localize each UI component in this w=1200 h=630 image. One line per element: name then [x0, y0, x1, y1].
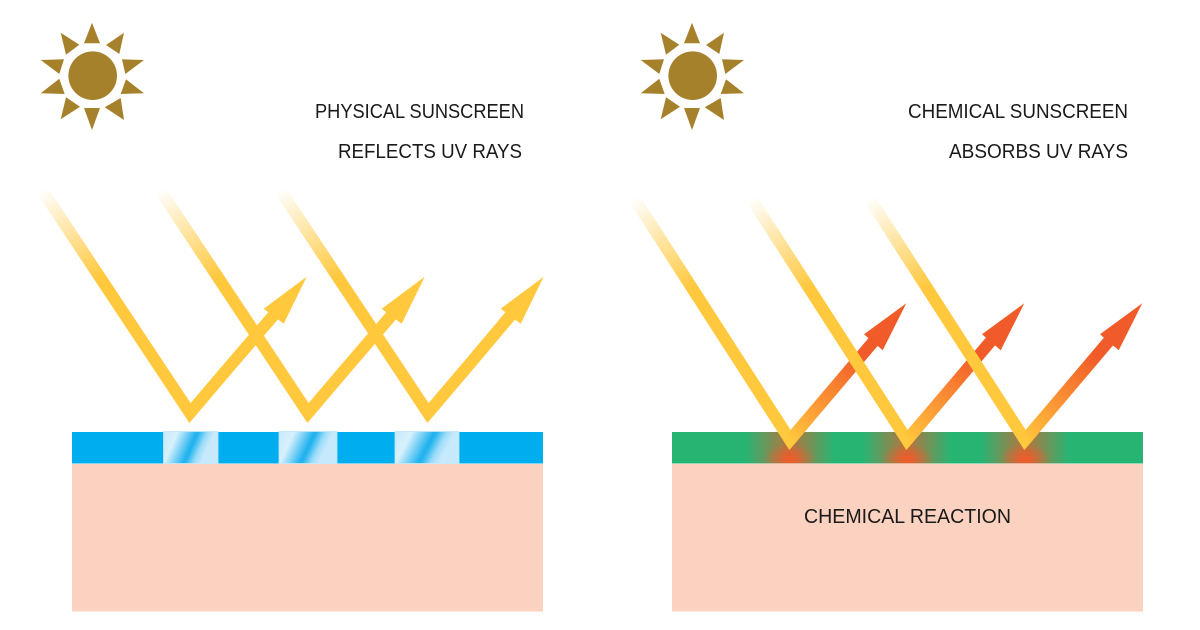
- icon: sun (physical): [41, 23, 144, 130]
- arrow: reflected ray 3: [280, 190, 544, 413]
- sunscreen layer: green with reaction glow: [672, 432, 1143, 464]
- arrow: reflected ray 1: [42, 190, 307, 413]
- heading: physical sunscreen: PHYSICAL SUNSCREEN: [315, 101, 524, 123]
- skin layer: [672, 464, 1143, 612]
- label: chemical reaction: CHEMICAL REACTION: [804, 506, 1011, 528]
- panel: chemical sunscreen: [634, 23, 1143, 611]
- sunscreen layer: blue with mineral particles: [72, 432, 543, 464]
- icon: sun (chemical): [641, 23, 744, 130]
- subheading: reflects uv rays: REFLECTS UV RAYS: [338, 141, 522, 163]
- panel: physical sunscreen: [41, 23, 544, 611]
- arrow: absorbed ray 2: [751, 198, 1024, 440]
- arrow: absorbed ray 3: [869, 198, 1142, 440]
- subheading: absorbs uv rays: ABSORBS UV RAYS: [949, 141, 1128, 163]
- arrow: reflected ray 2: [160, 190, 425, 413]
- heading: chemical sunscreen: CHEMICAL SUNSCREEN: [908, 101, 1128, 123]
- skin layer: [72, 464, 543, 612]
- arrow: absorbed ray 1: [634, 198, 906, 440]
